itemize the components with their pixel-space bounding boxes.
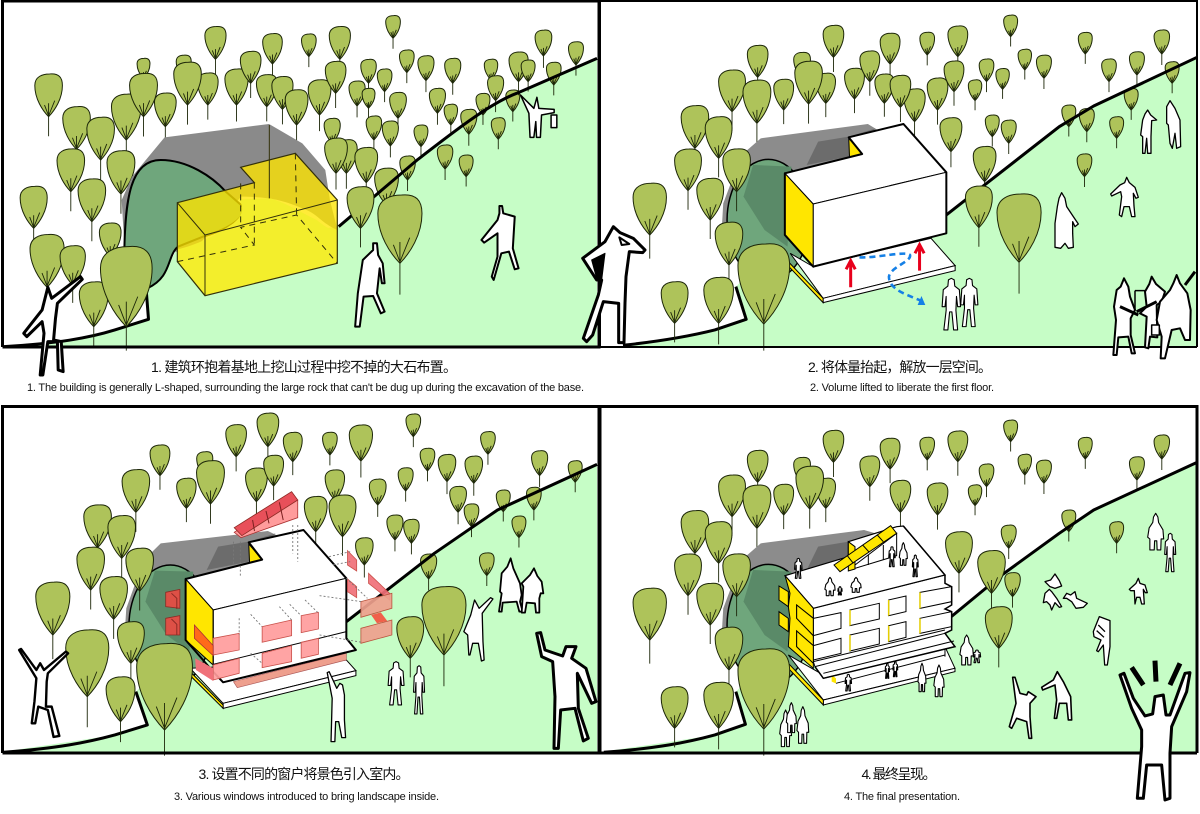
lower slab [190, 653, 356, 708]
ridge line [604, 462, 1197, 752]
yellow balconies [779, 586, 813, 663]
windows [813, 587, 952, 660]
foreground trees [30, 187, 422, 363]
hillside ground [4, 58, 597, 347]
ground floor slab [788, 647, 955, 705]
background trees [633, 15, 1179, 259]
building volume [186, 530, 356, 682]
roof wall and skylight [834, 526, 897, 572]
yellow building volume [177, 125, 337, 296]
pink window boxes [194, 612, 318, 681]
caption 1 English: 1. The building is generally L-shaped, surrounding the large rock that can't be dug up during the excavation of the base. [27, 382, 584, 394]
red skylight [234, 492, 298, 538]
yellow side wall [785, 576, 813, 668]
background trees [36, 413, 582, 659]
blue dashed circulation arrow [859, 254, 925, 305]
group of people bottom right panel 2 [1113, 272, 1195, 358]
caption 4 Chinese: 4. 最终呈现。 [862, 766, 936, 782]
caption 2 Chinese: 2. 将体量抬起，解放一层空间。 [808, 359, 992, 375]
ridge line [623, 57, 1197, 345]
grey rock mass [122, 124, 338, 253]
caption 3 Chinese: 3. 设置不同的窗户将景色引入室内。 [198, 766, 410, 782]
foreground trees [66, 548, 466, 770]
final building with balconies [779, 526, 955, 705]
big waving figure left [19, 649, 68, 737]
foreground trees [661, 550, 1012, 766]
green rock face [124, 160, 245, 288]
facade [813, 575, 955, 678]
panel 4 frame [600, 406, 1197, 753]
roof [785, 526, 945, 608]
upper floor lines [813, 630, 954, 673]
couple panel 3 [499, 558, 543, 613]
people on the right lawn [1009, 574, 1147, 738]
red lift arrows [846, 245, 924, 287]
panel 2: volume lifted [583, 1, 1197, 394]
hillside ground [604, 462, 1197, 752]
people panel 3 [327, 598, 493, 742]
background trees [633, 420, 1170, 664]
panel 1: L-shaped building around rock [2, 1, 599, 394]
rock [124, 531, 283, 686]
caption 2 English: 2. Volume lifted to liberate the first floor. [810, 382, 994, 394]
panel 3 frame [2, 406, 599, 753]
foreground trees [661, 149, 1041, 361]
big figure holding head [583, 227, 645, 343]
roof and terrace people [795, 543, 944, 697]
caption 3 English: 3. Various windows introduced to bring landscape inside. [174, 791, 439, 803]
people panel 4 [780, 513, 1176, 747]
rock [722, 530, 876, 686]
trees behind the rock [20, 16, 583, 272]
ridge line [4, 464, 597, 752]
hillside ground [4, 464, 597, 752]
panel 3: windows introduced [2, 406, 599, 803]
caption 1 Chinese: 1. 建筑环抱着基地上挖山过程中挖不掉的大石布置。 [151, 359, 457, 375]
big waving figure right [537, 633, 596, 748]
caption 4 English: 4. The final presentation. [844, 791, 960, 803]
lifted white volume [785, 124, 946, 267]
panel 1 frame [2, 1, 599, 347]
panel 2 frame [600, 1, 1197, 347]
dotted projection lines [233, 525, 367, 663]
people panel 2 [942, 278, 978, 330]
side window boxes [166, 551, 392, 643]
ground floor slab [788, 238, 955, 303]
ridge line [4, 58, 597, 347]
people panel 2 right upper [1055, 101, 1181, 248]
rock [722, 124, 883, 281]
panel 4: final presentation [600, 406, 1197, 803]
hillside ground [623, 57, 1197, 347]
cheering figure with rays [1120, 661, 1190, 800]
people panel 1 [24, 95, 557, 375]
